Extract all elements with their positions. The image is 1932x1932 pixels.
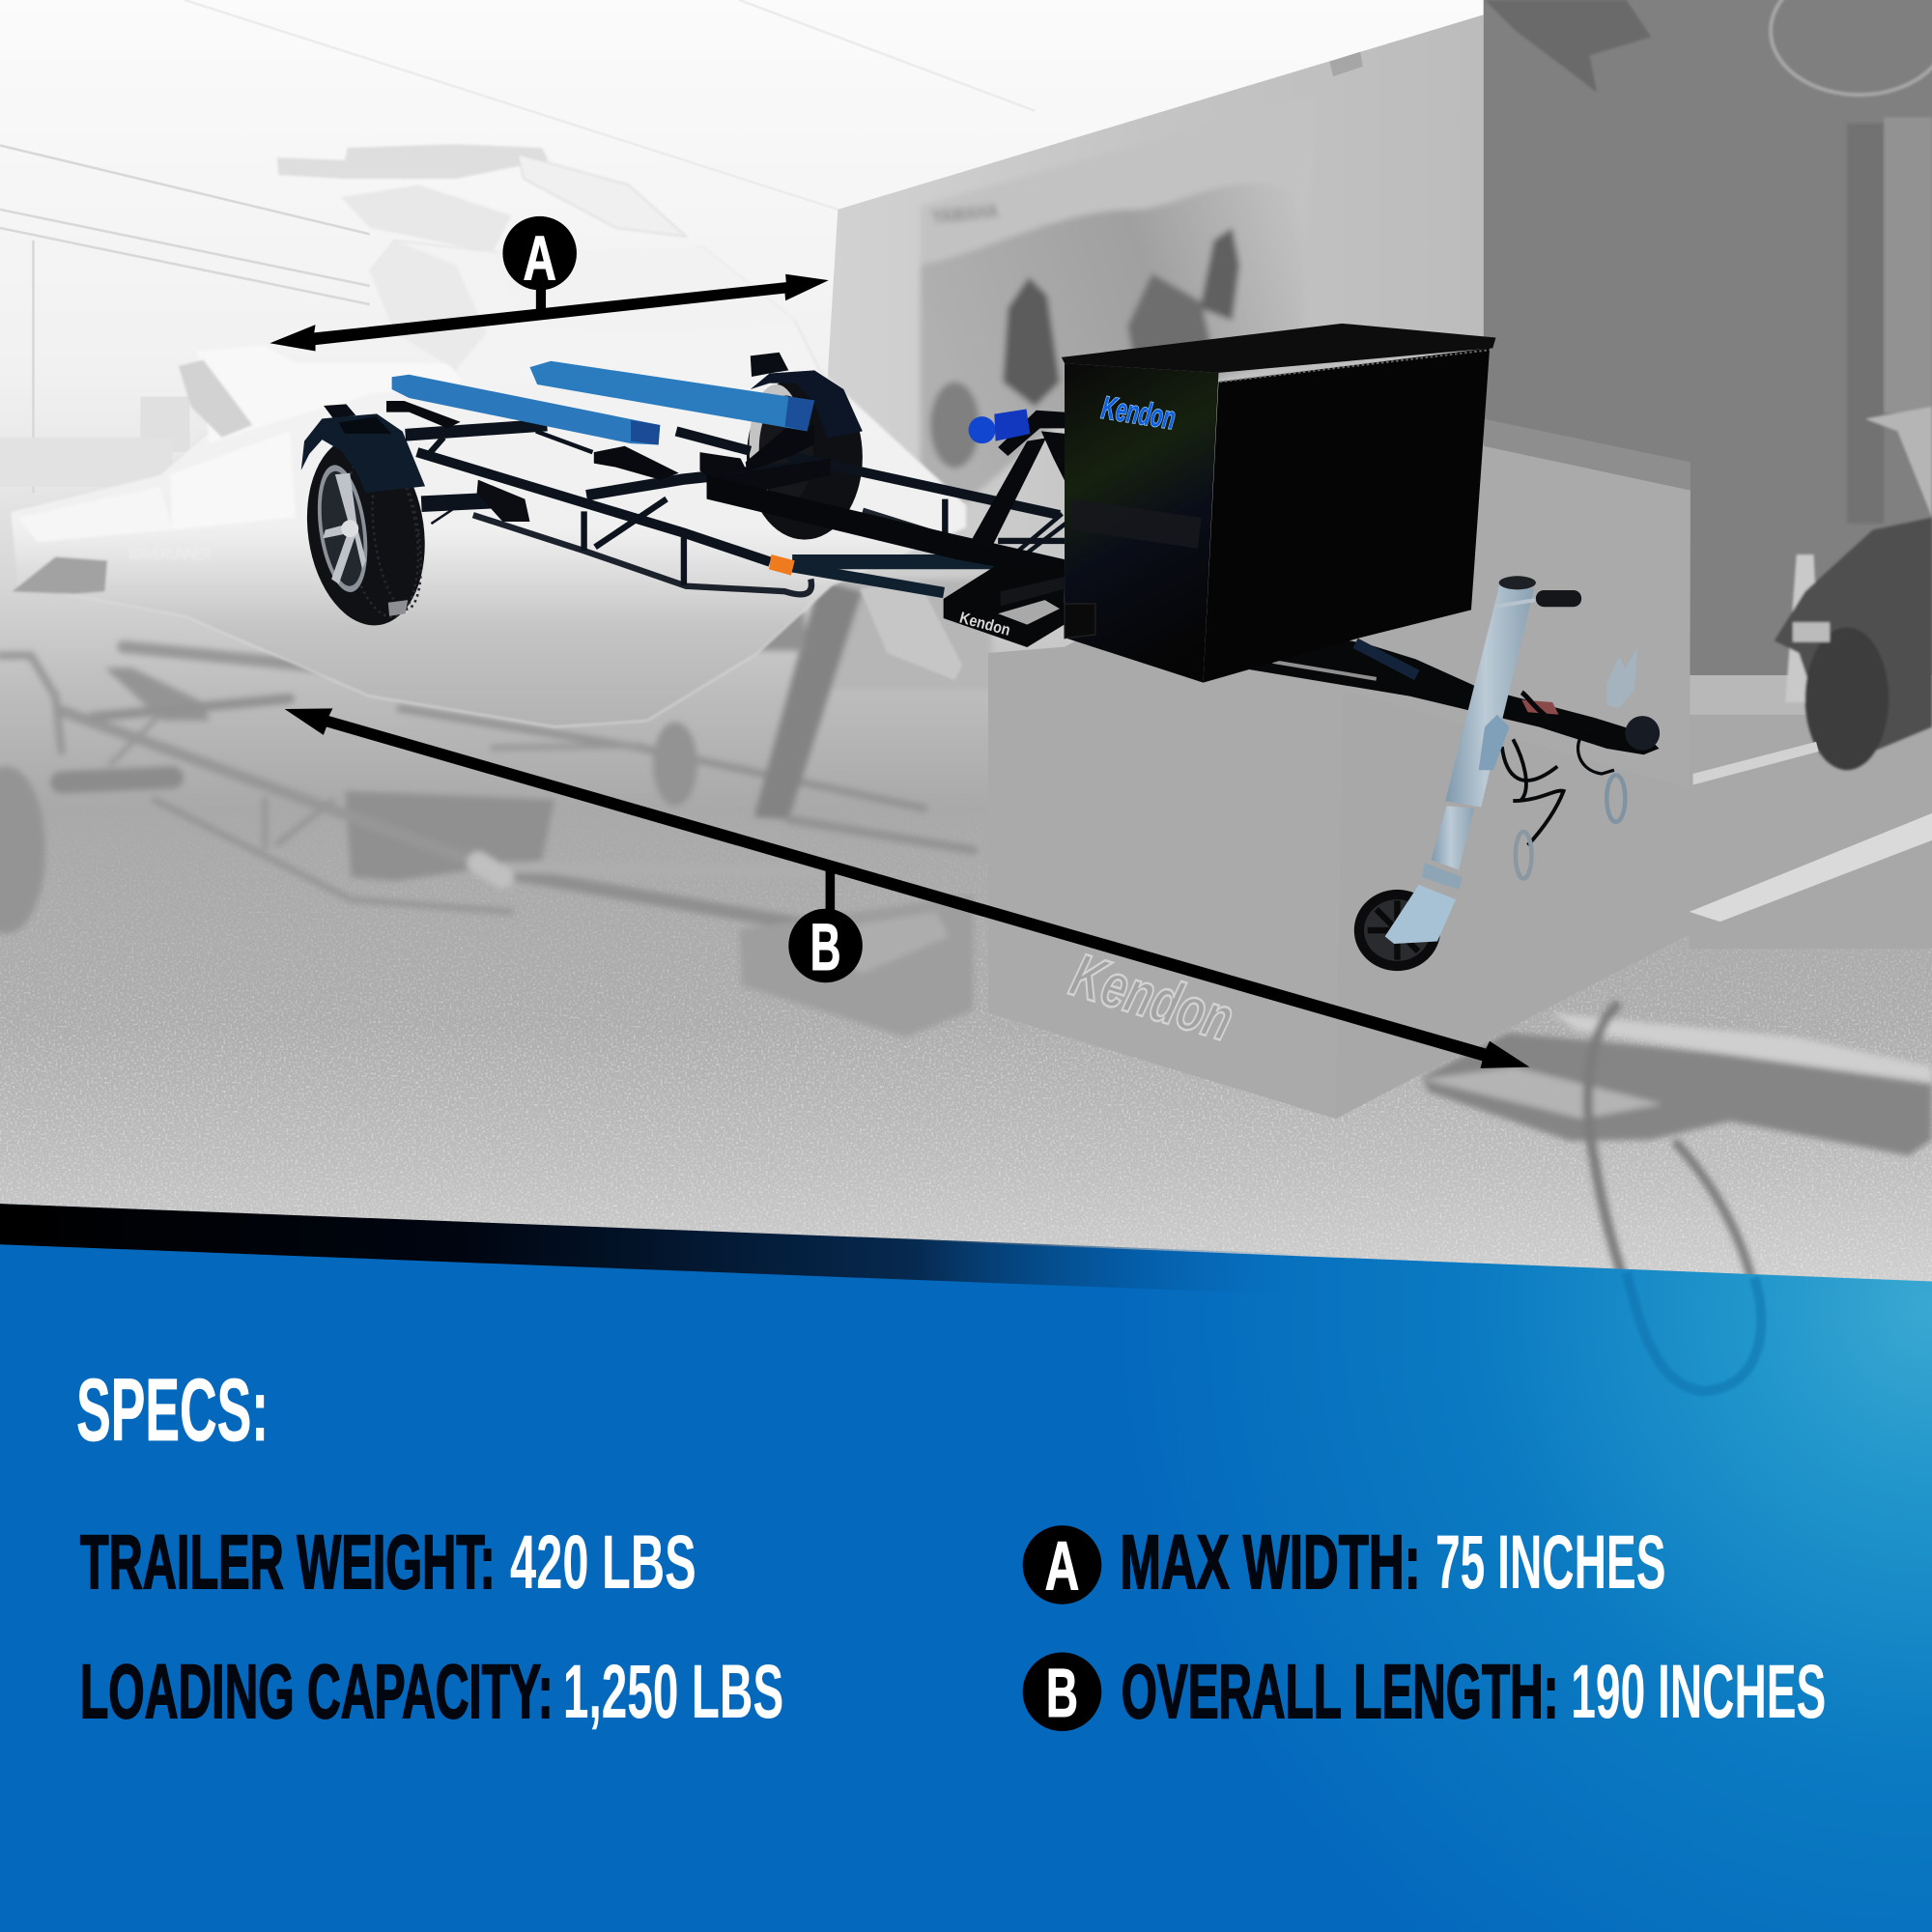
spec: overall length: OVERALL LENGTH: xyxy=(1122,1648,1559,1734)
spec: max width: MAX WIDTH: xyxy=(1120,1519,1421,1605)
badge A: A xyxy=(523,223,556,294)
heading: specs: SPECS: xyxy=(76,1361,269,1460)
ghost logo: Kendon xyxy=(1063,940,1241,1054)
black angled band xyxy=(0,1204,1306,1295)
ghost jet ski xyxy=(10,144,966,727)
center beam and hitch crossmembers xyxy=(699,452,1065,579)
spec: trailer weight: 420 LBS xyxy=(510,1519,696,1605)
deck sides xyxy=(18,487,173,542)
spec: max width: 75 INCHES xyxy=(1435,1519,1665,1605)
hitch bracket: Kendon xyxy=(957,609,1012,639)
tongue and coupler xyxy=(1209,616,1660,754)
ghost jack bracket xyxy=(860,579,962,680)
ski wordmark: WAVERUNNER xyxy=(128,544,211,563)
safety cables xyxy=(1502,693,1625,878)
jack stand xyxy=(1354,576,1581,971)
bunk brackets xyxy=(386,401,814,480)
badge B legend xyxy=(1023,1652,1101,1732)
dark building at right xyxy=(1484,0,1932,678)
hitch bracket xyxy=(944,562,1065,647)
wall of building xyxy=(828,14,1484,616)
badge B xyxy=(788,909,863,984)
ghost tongue and cable xyxy=(1422,1003,1932,1282)
cowl and windshield xyxy=(341,185,511,252)
wall lamp xyxy=(1329,52,1363,76)
spec: loading capacity: 1,250 LBS xyxy=(563,1648,783,1734)
ghost storage box xyxy=(988,419,1690,1119)
road at right of box xyxy=(1690,675,1932,949)
bottom blue specs panel xyxy=(0,1204,1932,1932)
faint distant wires xyxy=(185,0,1035,210)
near wheel and fender xyxy=(296,404,437,633)
ghost trailer under ski xyxy=(0,579,992,1037)
frame tubes xyxy=(406,425,1067,594)
poster brand: YAMAHA xyxy=(930,198,1000,229)
parking stripes xyxy=(1690,742,1932,922)
badge A legend: A xyxy=(1045,1527,1079,1605)
badge A legend xyxy=(1023,1525,1101,1605)
overhead wires and street pole xyxy=(0,146,370,493)
orange reflector band xyxy=(769,554,795,576)
faded photo background xyxy=(0,0,1932,1355)
handlebar xyxy=(277,144,549,179)
seat and backrest xyxy=(197,345,462,443)
badge A xyxy=(502,216,577,294)
spec: loading capacity: LOADING CAPACITY: xyxy=(80,1648,554,1734)
cable showing through panel xyxy=(1627,1273,1761,1391)
nozzle xyxy=(13,557,107,594)
dimension arrow B xyxy=(285,708,1530,1068)
far wheel and fender xyxy=(747,353,863,540)
dimension arrow A xyxy=(270,216,829,352)
badge B legend: B xyxy=(1046,1655,1078,1732)
badge B: B xyxy=(810,910,841,984)
blue bunk boards xyxy=(392,361,814,444)
winch stand xyxy=(969,409,1095,547)
upper signs on building xyxy=(1485,0,1932,524)
axle hanger xyxy=(477,480,529,522)
jack wheel xyxy=(1354,890,1440,971)
background motorcycle and cone xyxy=(1775,518,1932,770)
road speckle texture xyxy=(0,849,1932,1281)
box logo: Kendon xyxy=(1099,390,1178,437)
spec: trailer weight: TRAILER WEIGHT: xyxy=(80,1519,496,1605)
foreground trailer xyxy=(296,324,1660,971)
poster on wall xyxy=(921,96,1314,542)
storage box xyxy=(1062,324,1495,683)
distant building and fence xyxy=(0,397,189,487)
